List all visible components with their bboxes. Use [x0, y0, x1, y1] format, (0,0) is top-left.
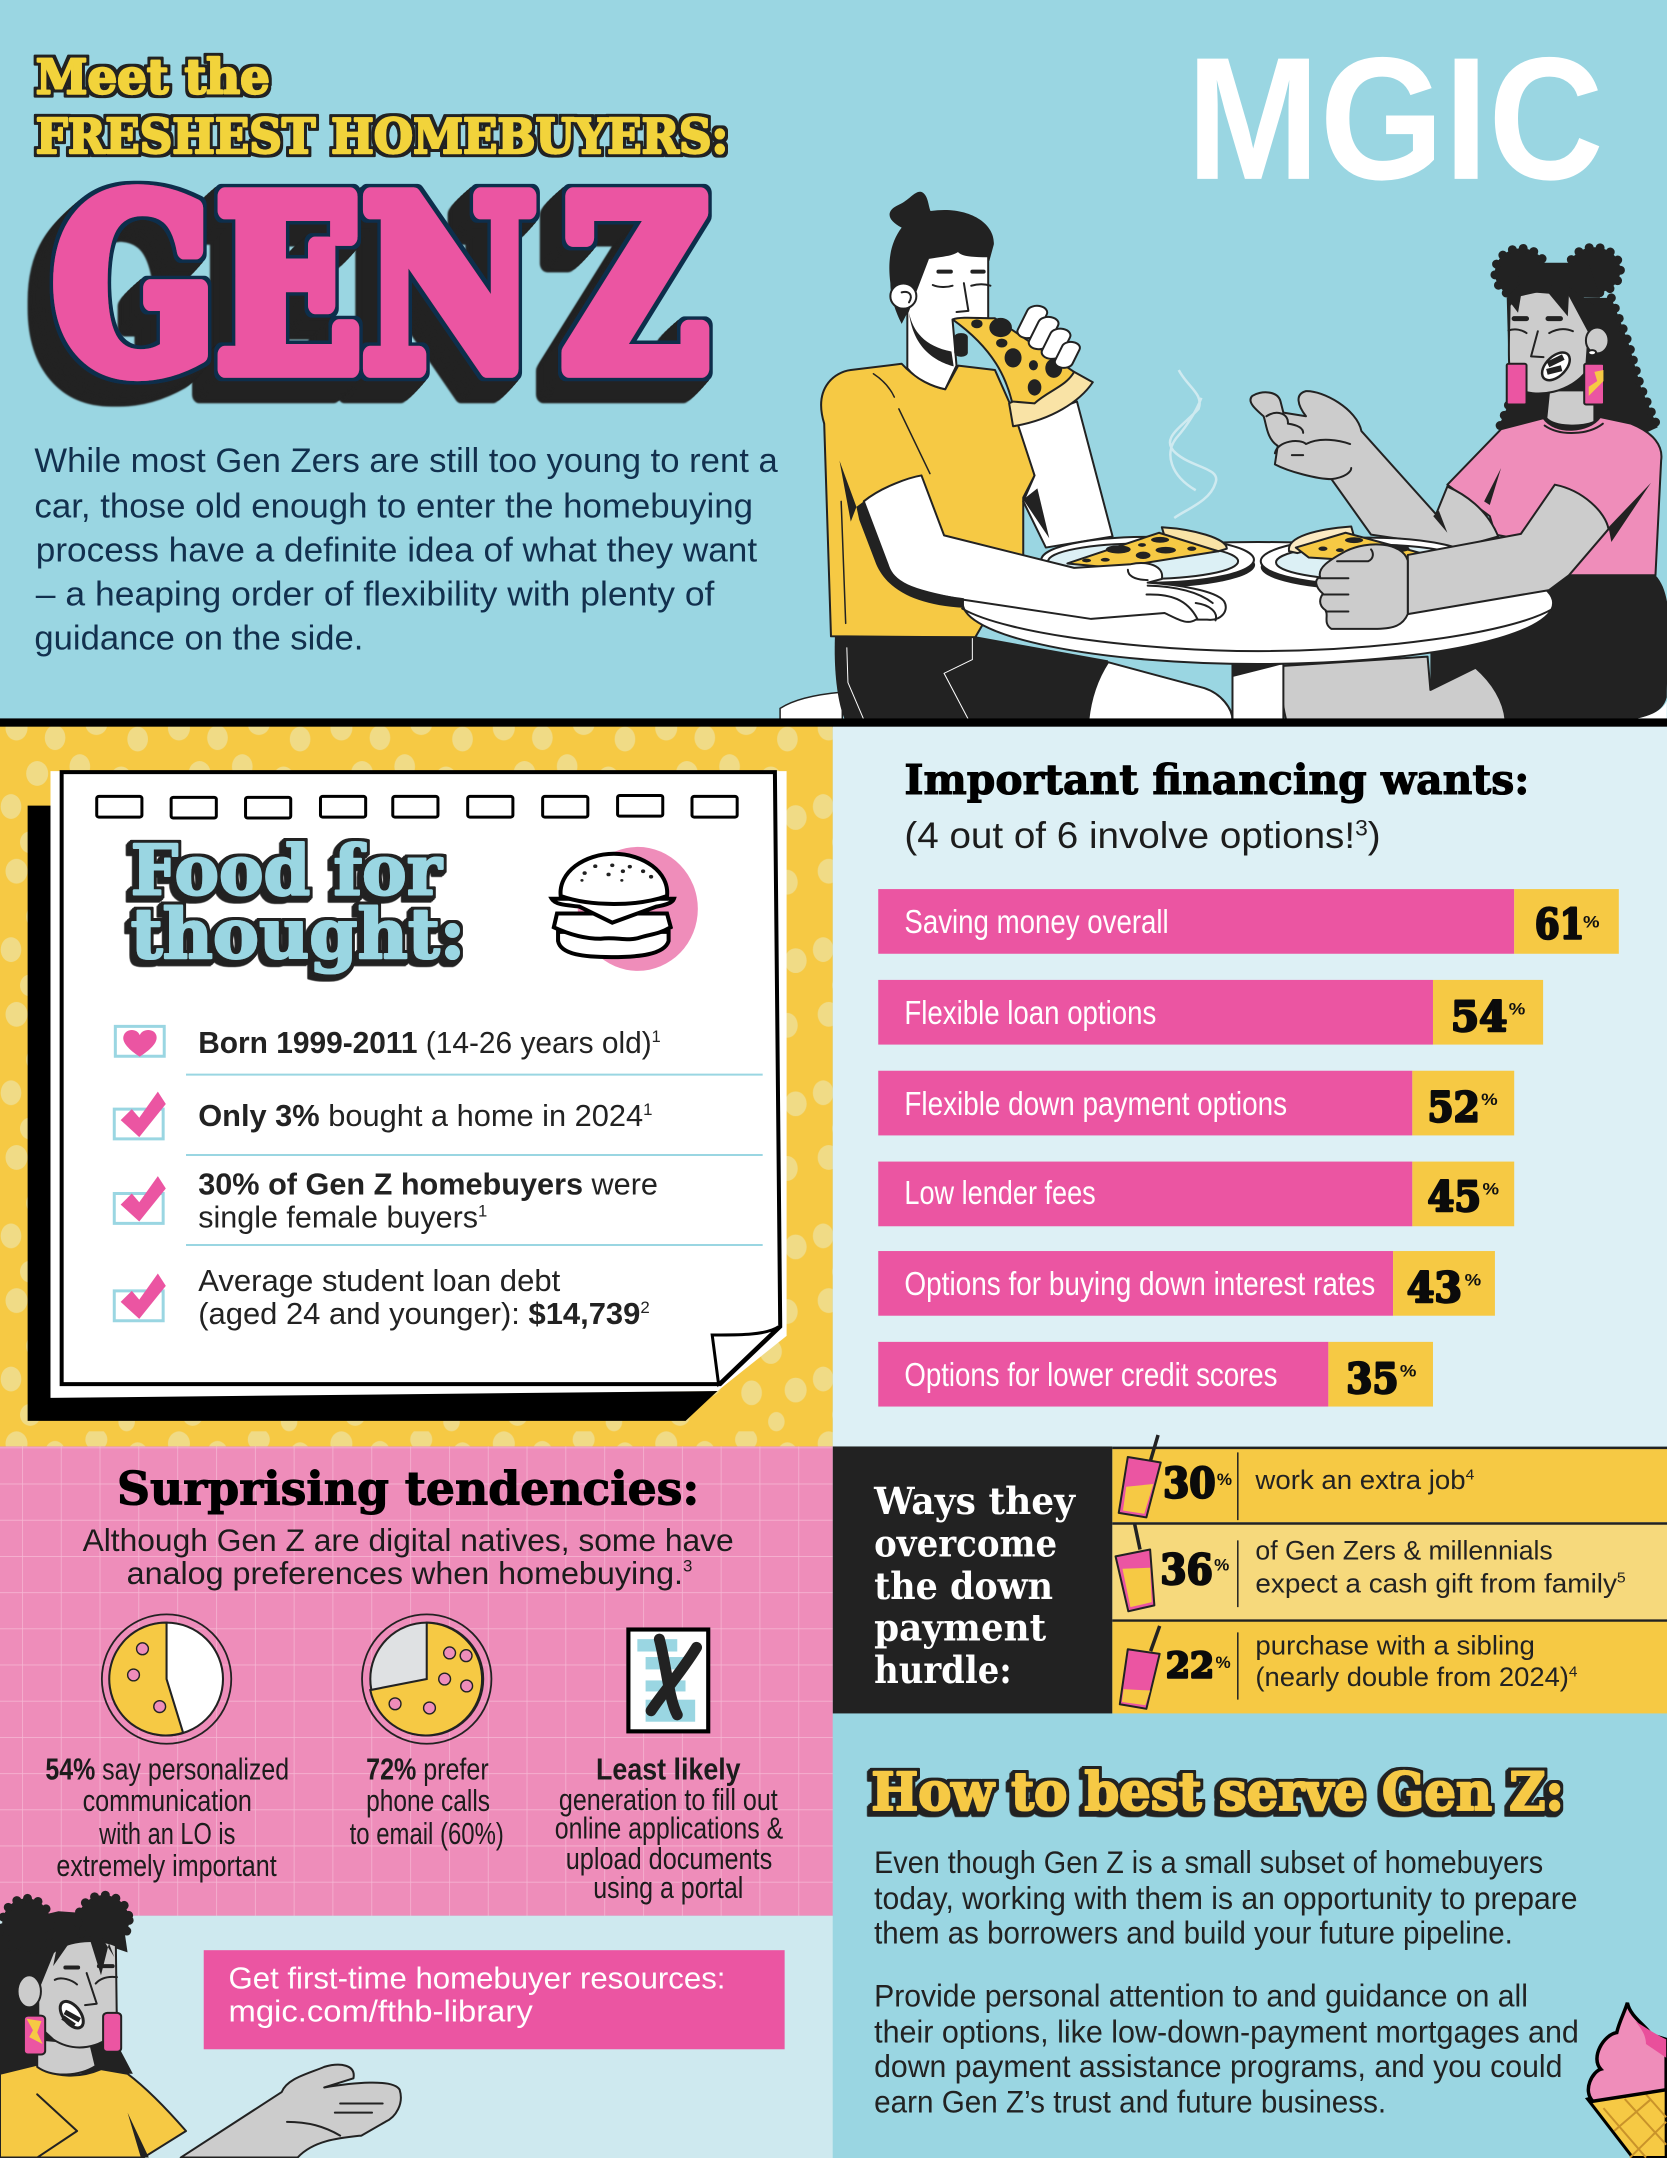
title: Gen Z: GEN — [52, 147, 537, 425]
woman neck — [1546, 390, 1594, 426]
earring bolt — [27, 2019, 43, 2044]
ear — [890, 284, 916, 309]
woman shirt — [1447, 417, 1661, 575]
heart checkbox — [115, 1026, 164, 1056]
earring left — [1507, 364, 1527, 404]
plate right — [1261, 544, 1476, 590]
bar: flexible loan: % — [1509, 1000, 1526, 1018]
checkbox 3 — [114, 1194, 163, 1223]
earring bolt — [1589, 370, 1603, 396]
text: cash gift — [1255, 1535, 1626, 1598]
table rim — [962, 609, 1553, 651]
cup 2 — [1116, 1549, 1154, 1611]
button text: mgic.com/fthb-library — [229, 1994, 533, 2029]
left heading: hurdle: — [874, 1648, 1012, 1692]
cream — [1588, 2003, 1666, 2101]
caption: 54%: 54% say personalized — [45, 1754, 289, 1787]
plate left — [1040, 542, 1255, 588]
bar: flexible down payment: 52 — [1427, 1083, 1480, 1132]
heading: food for thought: thought: — [131, 894, 465, 975]
cone hatching — [1603, 2094, 1666, 2158]
paragraph 2: down payment assistance programs, and you could — [874, 2048, 1562, 2084]
chart: 54% pie — [102, 1614, 231, 1744]
cup 1 drink — [1123, 1484, 1153, 1514]
burger bottom bun — [558, 932, 669, 957]
chair corner — [1628, 701, 1667, 720]
man arm shadow — [839, 461, 964, 608]
fact: single female buyers: 30% of Gen Z homebuyers were — [198, 1169, 658, 1202]
caption: 72%: to email (60%) — [350, 1818, 504, 1851]
cup 2 straw — [1135, 1524, 1140, 1549]
notepad border — [62, 772, 780, 1384]
bar: buying down rates: Options for buying down interest rates — [904, 1265, 1375, 1302]
cup 1 straw — [1151, 1435, 1158, 1460]
button — [204, 1950, 785, 2049]
bar: saving money — [878, 889, 1619, 954]
woman hair — [1498, 298, 1658, 446]
man hair — [889, 192, 994, 324]
fringe — [50, 1936, 114, 1980]
steam — [1170, 370, 1216, 518]
pizza right — [1296, 533, 1428, 561]
text: cash gift: 5 — [1617, 1570, 1626, 1587]
intro text: process have a definite idea of what they want — [36, 532, 758, 570]
subheading: 3 — [683, 1558, 692, 1576]
caption: least likely: upload documents — [566, 1843, 772, 1876]
button text: Get first-time homebuyer resources: — [229, 1961, 725, 1996]
fact: single female buyers — [198, 1169, 658, 1235]
bar: buying down rates — [878, 1251, 1495, 1316]
teeth stripes — [63, 2012, 80, 2026]
face — [38, 1941, 117, 2047]
heading: food for thought: Food for — [131, 831, 443, 912]
bar: saving money: 61 — [1535, 900, 1584, 949]
paragraph 1 — [874, 1844, 1578, 1950]
stool — [780, 692, 842, 720]
left heading: payment — [874, 1606, 1046, 1650]
bar: saving money: Saving money overall — [904, 903, 1169, 940]
bar: buying down rates: 43 — [1407, 1263, 1462, 1312]
table — [963, 542, 1553, 664]
raised arm shadow — [1433, 511, 1447, 533]
text: sibling: 4 — [1569, 1663, 1578, 1680]
text: cash gift: of Gen Zers & millennials — [1255, 1535, 1553, 1565]
divider bar — [0, 718, 1667, 727]
row lines — [1112, 1448, 1667, 1621]
neck — [37, 2039, 96, 2075]
stat 36%: % — [1214, 1556, 1230, 1574]
bar: flexible loan: Flexible loan options — [904, 994, 1156, 1031]
checkbox 4 — [114, 1291, 163, 1321]
man lower arm — [864, 475, 1226, 622]
left panel — [833, 1446, 1112, 1713]
teeth stripes — [1547, 357, 1563, 372]
fact: bought: 1 — [643, 1101, 652, 1119]
man shirt — [821, 364, 1035, 637]
plate right inner — [1276, 545, 1466, 580]
fact: born: 1 — [652, 1028, 661, 1046]
woman fist — [1316, 544, 1408, 629]
intro text: guidance on the side. — [34, 620, 363, 658]
heading: Surprising tendencies: — [117, 1461, 699, 1515]
caption: least likely: Least likely — [596, 1754, 741, 1787]
caption: 54%: extremely important — [56, 1850, 277, 1883]
cup 1 — [1119, 1457, 1161, 1517]
burger cheese — [552, 899, 674, 923]
paragraph 2: earn Gen Z’s trust and future business. — [874, 2084, 1386, 2120]
chair — [1088, 662, 1232, 720]
bar: lower credit scores: 35 — [1346, 1354, 1399, 1403]
shirt — [0, 2065, 186, 2158]
hair top — [1515, 263, 1600, 298]
beard — [909, 313, 954, 366]
sesame — [580, 863, 653, 882]
woman eyes and nose — [1508, 329, 1573, 357]
panel background — [833, 1713, 1667, 2158]
brows — [65, 1966, 113, 1968]
stat 30%: % — [1217, 1471, 1232, 1489]
vertical dividers — [1237, 1452, 1239, 1700]
dividers — [186, 1075, 763, 1245]
ear — [18, 1975, 41, 2007]
arm shadow — [1023, 488, 1049, 538]
heading: food for thought — [131, 831, 465, 975]
woman raised arm — [1250, 391, 1498, 548]
illustration: woman gesturing — [0, 1895, 401, 2158]
subheading: analog preferences when homebuying. — [127, 1555, 672, 1591]
left heading — [873, 1479, 1076, 1692]
sleeve shade — [128, 2113, 149, 2158]
fingers — [1015, 304, 1082, 369]
pizza left toppings — [1082, 537, 1196, 562]
hair — [0, 1911, 133, 2074]
check 3 — [121, 1176, 166, 1222]
subheading: (4 out of 6 involve options! — [904, 814, 1338, 856]
sleeve front — [37, 2094, 77, 2158]
subheading: ) — [1368, 814, 1381, 856]
fringe — [1507, 283, 1594, 328]
cream shade — [1635, 2021, 1666, 2058]
paragraph 1: Even though Gen Z is a small subset of homebuyers — [874, 1844, 1543, 1880]
text: sibling: purchase with a sibling — [1255, 1630, 1535, 1660]
fact: born: Born 1999-2011 (14-26 years old) — [198, 1027, 655, 1060]
text: work an extra job: 4 — [1466, 1466, 1474, 1483]
paragraph 1: them as borrowers and build your future pipeline. — [874, 1914, 1513, 1950]
eyes and nose — [933, 283, 990, 312]
ear inner — [902, 292, 911, 302]
panel: food for thought — [0, 727, 833, 1446]
intro text: car, those old enough to enter the homebuying — [34, 487, 753, 525]
bar: flexible down payment: % — [1481, 1091, 1498, 1109]
title: Gen Z: Z — [562, 147, 709, 425]
earring right — [103, 2013, 121, 2052]
panel background — [0, 1446, 833, 1916]
pizza left crust — [1162, 527, 1227, 551]
caption: least likely: generation to fill out — [559, 1784, 778, 1817]
burger top bun — [561, 854, 667, 904]
burger backdrop — [578, 847, 698, 971]
braid bumps — [1499, 298, 1658, 427]
bar: lower credit scores: % — [1400, 1362, 1417, 1380]
intro text — [34, 442, 779, 658]
bar: low lender fees: Low lender fees — [904, 1174, 1096, 1211]
caption: least likely: using a portal — [593, 1872, 743, 1905]
button text — [229, 1961, 725, 2029]
eyes and nose — [55, 1973, 117, 2005]
panel: surprising tendencies — [0, 1446, 833, 1916]
row 2 — [1112, 1522, 1667, 1620]
table leg — [1232, 662, 1283, 720]
man pants — [835, 636, 1108, 720]
panel: ways they overcome — [833, 1435, 1667, 1713]
mouth — [55, 1998, 88, 2031]
text: work an extra job: work an extra job — [1255, 1465, 1460, 1495]
icon: crossed-out document — [628, 1630, 708, 1731]
subheading: Although Gen Z are digital natives, some have — [83, 1522, 734, 1558]
caption: least likely — [555, 1754, 783, 1905]
bar: flexible down payment — [878, 1071, 1514, 1135]
caption: least likely: online applications & — [555, 1813, 783, 1846]
bar: lower credit scores — [878, 1342, 1433, 1407]
fact: student debt — [198, 1265, 650, 1331]
paragraph 2: their options, like low-down-payment mortgages and — [874, 2013, 1579, 2049]
buns — [2, 1895, 129, 1952]
earring right — [1584, 364, 1604, 404]
stat 22%: % — [1215, 1654, 1231, 1672]
panel background — [833, 727, 1667, 1446]
left heading: overcome — [874, 1522, 1057, 1566]
caption: 54%: communication — [83, 1785, 252, 1818]
stat 22%: 22 — [1166, 1647, 1214, 1687]
title: Meet the: Meet the — [36, 50, 270, 106]
cone — [1588, 2078, 1666, 2158]
icons: drink cups — [1116, 1435, 1238, 1709]
cup 2 drink — [1122, 1568, 1152, 1607]
paragraph 2 — [874, 1978, 1579, 2120]
title: Freshest Homebuyers: FRESHEST HOMEBUYERS: — [36, 109, 728, 165]
bar: low lender fees: 45 — [1427, 1172, 1481, 1221]
panel: financing wants — [833, 727, 1667, 1446]
subheading — [83, 1522, 734, 1591]
intro text: – a heaping order of flexibility with plenty of — [36, 576, 715, 614]
notepad paper — [50, 771, 787, 1398]
plate right top — [1261, 538, 1476, 585]
check 2 — [121, 1092, 166, 1137]
bar: low lender fees — [878, 1162, 1514, 1226]
notepad — [28, 771, 787, 1421]
woman skirt — [1430, 575, 1667, 720]
collar — [1545, 424, 1603, 433]
paragraph 1: today, working with them is an opportunity to prepare — [874, 1880, 1578, 1916]
hand lines — [287, 2104, 383, 2136]
text: cash gift: expect a cash gift from family — [1255, 1568, 1603, 1598]
fact: student debt: (aged 24 and younger): $14,739 — [198, 1298, 638, 1331]
woman leg — [1282, 657, 1506, 720]
panel background — [0, 727, 833, 1446]
panel: header background — [0, 0, 1667, 718]
panel background — [0, 1916, 833, 2158]
row 3 — [1112, 1620, 1667, 1713]
plate left top — [1041, 537, 1254, 583]
leg shadow — [1232, 664, 1283, 677]
caption: 72% — [350, 1754, 504, 1851]
caption: 54% — [45, 1754, 289, 1883]
man neck and face — [907, 251, 988, 389]
mouth — [1536, 350, 1575, 383]
brows — [938, 270, 984, 274]
text: sibling: (nearly double from 2024) — [1255, 1662, 1563, 1692]
panel: how to best serve — [833, 1713, 1667, 2158]
paragraph 2: Provide personal attention to and guidance on all — [874, 1978, 1528, 2014]
fact: student debt: Average student loan debt — [198, 1265, 561, 1298]
fact: bought: Only 3% bought a home in 2024 — [198, 1100, 638, 1133]
pizza right toppings — [1318, 537, 1409, 552]
caption: 54%: with an LO is — [98, 1818, 235, 1851]
heart — [123, 1030, 157, 1057]
pizza slice — [953, 318, 1074, 403]
fact: single female buyers: 1 — [478, 1203, 487, 1221]
earring left — [24, 2016, 45, 2055]
shirt fold lines — [841, 374, 930, 623]
woman lower arm — [1408, 485, 1609, 614]
icon: ice cream — [1588, 2003, 1666, 2158]
shirt shadow — [1484, 468, 1651, 542]
woman face — [1509, 291, 1589, 394]
plate left inner — [1048, 543, 1238, 579]
logo: MGIC: MGIC — [1187, 22, 1604, 217]
row 1 — [1112, 1448, 1667, 1522]
heading: Important financing wants: — [904, 755, 1529, 804]
fist lines — [1320, 549, 1373, 612]
finger lines — [1266, 413, 1351, 479]
burger patty — [554, 913, 671, 939]
caption: 72%: phone calls — [366, 1785, 490, 1818]
bar: flexible loan — [878, 980, 1543, 1045]
illustration: friends eating pizza — [780, 192, 1667, 720]
text: sibling — [1255, 1630, 1578, 1692]
cup 3 straw — [1151, 1626, 1160, 1651]
panel: resources — [0, 1895, 833, 2158]
pepperoni — [971, 318, 1062, 396]
pizza right crust — [1289, 526, 1354, 553]
pizza crust — [1009, 372, 1093, 426]
left heading: Ways they — [873, 1479, 1076, 1523]
stat 30%: 30 — [1163, 1458, 1215, 1507]
bar: low lender fees: % — [1483, 1181, 1499, 1199]
bar: saving money: % — [1583, 914, 1600, 932]
bar: lower credit scores: Options for lower credit scores — [904, 1356, 1277, 1393]
raised arm — [1018, 401, 1113, 548]
pizza left — [1067, 533, 1218, 568]
checkbox 2 — [114, 1109, 163, 1139]
cup 3 drink — [1122, 1689, 1150, 1705]
brows — [1514, 316, 1560, 321]
woman ear — [1586, 328, 1609, 353]
notepad shadow — [28, 806, 718, 1421]
stat 36%: 36 — [1160, 1545, 1213, 1594]
caption: 72%: 72% prefer — [366, 1754, 489, 1787]
goatee — [954, 333, 968, 357]
bar: flexible loan: 54 — [1451, 992, 1507, 1041]
subheading: 3 — [1355, 815, 1368, 840]
page fold — [712, 1327, 779, 1384]
binder holes — [97, 795, 737, 818]
check 4 — [121, 1273, 166, 1319]
fact: single female buyers: single female buyers — [198, 1202, 476, 1235]
left heading: the down — [874, 1564, 1053, 1608]
woman buns — [1495, 247, 1620, 297]
intro text: While most Gen Zers are still too young to rent a — [34, 442, 779, 480]
heading: How to best serve Gen Z: — [871, 1762, 1564, 1823]
man hand lines — [1128, 570, 1216, 620]
cup 3 — [1120, 1649, 1160, 1709]
chart: 72% pie — [362, 1614, 491, 1744]
bar: flexible down payment: Flexible down payment options — [904, 1085, 1287, 1122]
arm and hand — [181, 2065, 401, 2158]
fact: student debt: 2 — [640, 1299, 650, 1317]
pants lines — [847, 638, 972, 720]
earring stud — [1588, 350, 1596, 355]
bar: buying down rates: % — [1465, 1271, 1482, 1289]
